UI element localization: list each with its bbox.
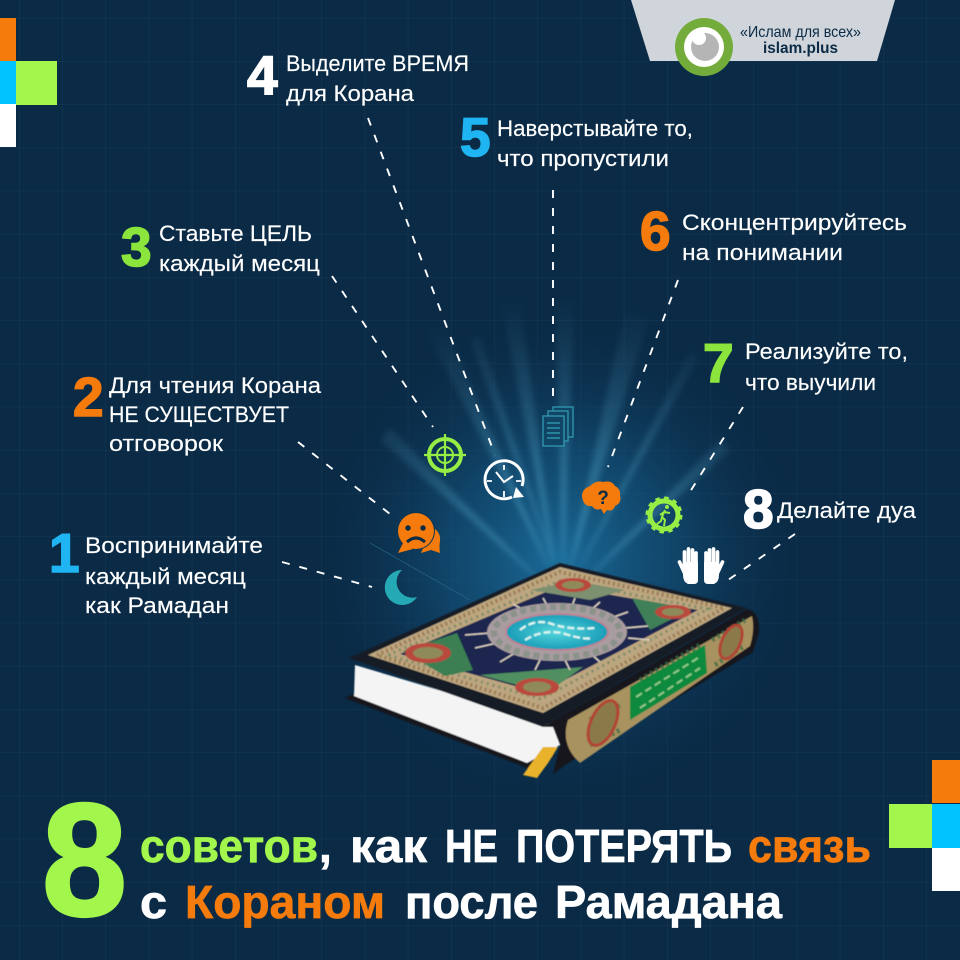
logo banner [631, 0, 895, 76]
tip 7 [703, 332, 908, 395]
icon: brain with question mark: ? [597, 488, 609, 509]
title line 1: как [350, 820, 428, 872]
big number 8: 8 [42, 770, 127, 949]
tip 8 [743, 478, 917, 540]
tip 6: Сконцентрируйтесь [682, 210, 907, 235]
icon: praying hands [680, 549, 722, 584]
logo banner: «Ислам для всех» [740, 24, 861, 41]
title line 2: с [140, 876, 167, 928]
tip 8: Делайте дуа [777, 498, 917, 523]
central medallion [487, 603, 627, 661]
corner ornaments [403, 633, 473, 676]
decorative squares bottom right [889, 760, 960, 891]
icon: target [424, 434, 466, 476]
logo banner: islam.plus [763, 40, 838, 57]
spine [543, 609, 759, 774]
top cover [349, 563, 747, 727]
tip 4: для Корана [286, 81, 415, 106]
page block [354, 665, 560, 763]
title line 2 [140, 876, 782, 928]
title line 1: НЕ [445, 820, 498, 872]
tip 7: Реализуйте то, [745, 339, 908, 364]
tip 4: Выделите ВРЕМЯ [286, 51, 469, 76]
tip 5: Наверстывайте то, [497, 116, 693, 141]
tip 2: Для чтения Корана [109, 373, 322, 398]
tip 1 [49, 522, 263, 618]
tip 5 [460, 106, 693, 171]
ribbon bookmark [523, 747, 558, 778]
tip 6 [640, 200, 907, 265]
title line 1: ПОТЕРЯТЬ [516, 820, 732, 872]
tip 1: 1 [49, 522, 80, 584]
tip 2: НЕ СУЩЕСТВУЕТ [109, 402, 289, 427]
tip 3: Ставьте ЦЕЛЬ [159, 221, 312, 246]
tip 1: как Рамадан [85, 593, 229, 618]
tip 7: что выучили [745, 370, 876, 395]
medallion rays [465, 598, 650, 670]
tip 4 [247, 44, 469, 106]
tip 1: Воспринимайте [85, 533, 263, 558]
tip 6: 6 [640, 200, 671, 262]
icon: documents [543, 407, 573, 446]
tip 3 [121, 216, 320, 278]
title line 2: Кораном [185, 876, 385, 928]
tip 7: 7 [703, 332, 734, 394]
light glow behind book [300, 298, 820, 820]
title line 1: , [319, 820, 332, 872]
tip 4: 4 [247, 44, 278, 106]
title line 2: Рамадана [555, 876, 782, 928]
tip 3: 3 [121, 216, 152, 278]
icon: brain with question mark [582, 482, 620, 514]
icon: sad speech bubbles [397, 512, 440, 553]
tip 2: отговорок [109, 431, 223, 456]
title line 1: связь [748, 820, 871, 872]
tip 5: 5 [460, 106, 491, 168]
icon: crescent moon [385, 570, 417, 605]
tip 3: каждый месяц [159, 251, 320, 276]
tip 1: каждый месяц [85, 564, 246, 589]
tip 5: что пропустили [497, 146, 669, 171]
title line 1 [140, 820, 871, 872]
book [345, 563, 759, 778]
title line 2: после [405, 876, 538, 928]
tip 6: на понимании [682, 240, 843, 265]
title line 1: советов [140, 820, 318, 872]
tip 8: 8 [743, 478, 774, 540]
tip 2: 2 [73, 366, 104, 428]
icon: clock [485, 461, 524, 499]
icon: gear with runner [648, 498, 680, 532]
bottom cover [345, 693, 556, 769]
tip 2 [73, 366, 322, 456]
decorative squares top left [0, 18, 57, 147]
title [42, 770, 871, 949]
dashed connectors [282, 118, 795, 587]
